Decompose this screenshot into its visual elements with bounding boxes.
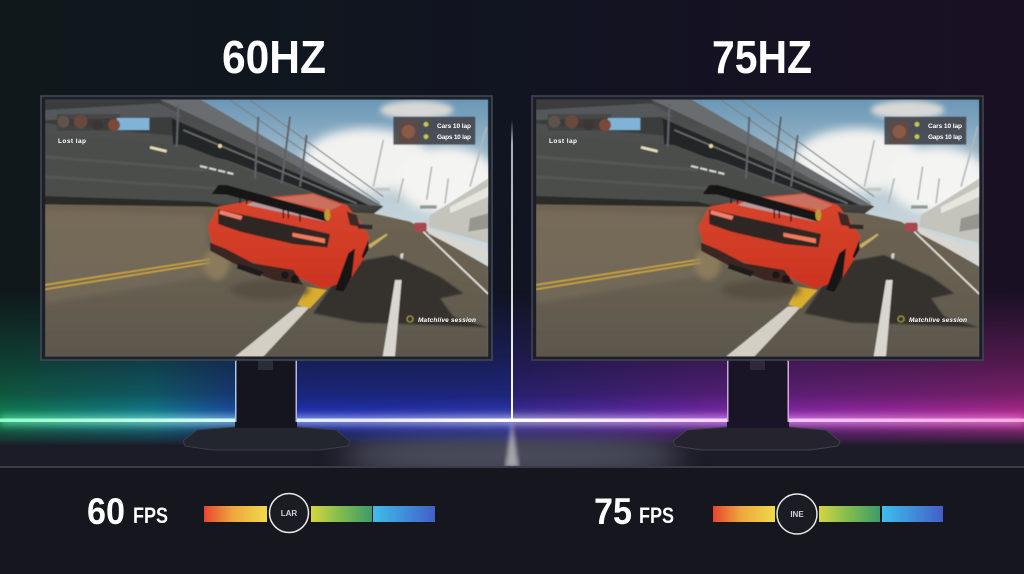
stat: 75 FPS: FPS (639, 503, 674, 528)
monitor: 75Hz (532, 96, 988, 450)
monitor: 60Hz (41, 96, 497, 450)
glow: left blue and teal wall (0, 302, 511, 418)
color bar with badge: 75 FPS (713, 494, 943, 534)
floor reflection (0, 422, 1024, 466)
HUD text: Cars 10 lap (437, 123, 471, 130)
HUD text: Matchlive session (909, 317, 967, 324)
HUD text: Lost lap (549, 138, 577, 145)
glow: right purple wall (513, 302, 1024, 418)
HUD text: Gaps 10 lap (928, 134, 962, 141)
HUD text: Lost lap (58, 138, 86, 145)
center divider line (511, 120, 513, 422)
HUD text (549, 123, 967, 324)
HUD text: Matchlive session (418, 317, 476, 324)
bottom panel (0, 466, 1024, 574)
neon line (0, 416, 1024, 425)
color bar with badge: 60 FPS (204, 494, 435, 532)
title: 75HZ: 75HZ (712, 31, 812, 83)
monitor stand (183, 358, 350, 450)
monitor stand (673, 358, 840, 450)
game screen: racing car (536, 99, 988, 357)
stat: 60 FPS: FPS (133, 503, 168, 528)
stat: 60 FPS: 60 (87, 491, 125, 532)
HUD text: Cars 10 lap (928, 123, 962, 130)
color bar with badge: 75 FPS: INE (790, 510, 804, 519)
HUD text (58, 123, 476, 324)
stat: 75 FPS: 75 (594, 491, 632, 532)
game screen: racing car (45, 99, 497, 357)
color bar with badge: 60 FPS: LAR (281, 509, 297, 518)
HUD text: Gaps 10 lap (437, 134, 471, 141)
stat: 60 FPS (87, 491, 168, 532)
monitor bezel (532, 96, 983, 360)
stat: 75 FPS (594, 491, 674, 532)
title: 60HZ: 60HZ (222, 31, 326, 83)
monitor bezel (41, 96, 492, 360)
